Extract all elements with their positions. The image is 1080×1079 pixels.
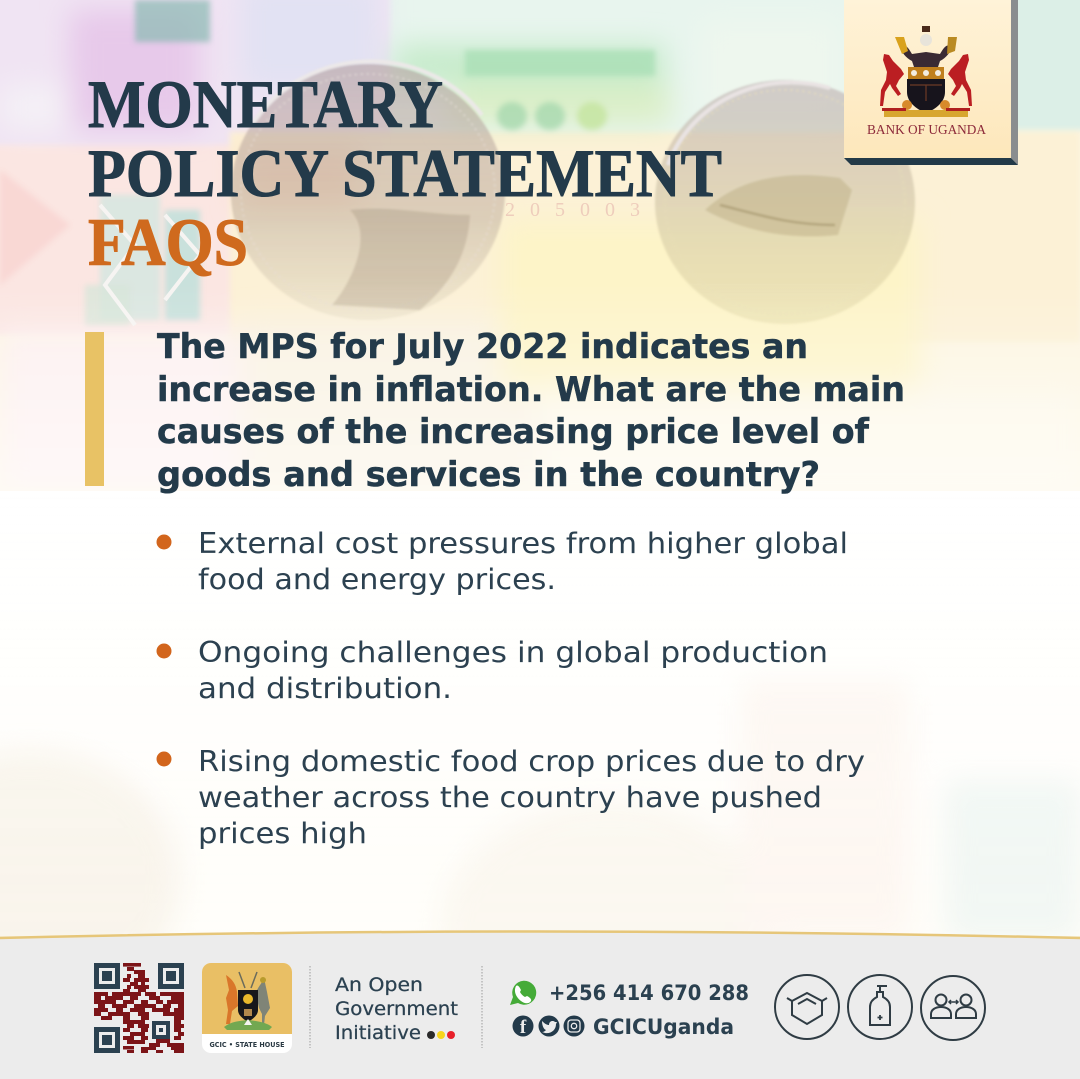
bullet 3 (156, 745, 865, 850)
contact: phone: +256 414 670 288 (549, 981, 749, 1005)
icon: WhatsApp (510, 981, 536, 1005)
contact: social handle: GCICUganda (593, 1015, 734, 1039)
bullet 2: and distribution. (198, 672, 452, 705)
icon: instagram (564, 1016, 584, 1036)
icon: facebook: f (520, 1017, 527, 1038)
banknote zigzag (100, 205, 200, 325)
bullet 3: prices high (198, 817, 367, 850)
title accent: FAQS: FAQS (88, 204, 248, 280)
banknote serial number: 205003 (505, 199, 640, 221)
tagline: An Open Government Initiative: An Open (335, 974, 423, 996)
logo label: BANK OF UGANDA (867, 122, 986, 137)
question heading: causes of the increasing price level of (157, 412, 870, 452)
bullet 3: weather across the country have pushed (198, 781, 822, 814)
icon: Bank of Uganda crest (880, 26, 972, 117)
bullet 1 (156, 527, 848, 596)
title (88, 66, 722, 280)
divider (309, 966, 311, 1048)
footer band (0, 932, 1080, 1079)
logo card: Bank of Uganda (844, 0, 1018, 165)
coin: right (655, 80, 915, 324)
icon: face mask (775, 975, 839, 1039)
question heading (157, 327, 905, 495)
title: MONETARY (88, 66, 443, 142)
divider (481, 966, 483, 1048)
icon: Uganda coat of arms (224, 972, 272, 1030)
flag dots (427, 1031, 455, 1039)
bullet 1: External cost pressures from higher global (198, 527, 848, 560)
icon: sanitizer bottle (848, 975, 912, 1039)
bullet 3: Rising domestic food crop prices due to dry (198, 745, 865, 778)
bullet list (156, 527, 865, 850)
QR code (94, 963, 184, 1053)
badge label: GCIC • STATE HOUSE (210, 1041, 285, 1049)
bullet 2 (156, 636, 828, 705)
bullet 1: food and energy prices. (198, 563, 556, 596)
accent bar (85, 332, 104, 486)
badge: GCIC State House (202, 963, 292, 1053)
contact: social handle (512, 1015, 734, 1039)
tagline: An Open Government Initiative: Government (335, 998, 458, 1020)
icon: twitter (538, 1016, 560, 1036)
question heading: The MPS for July 2022 indicates an (157, 327, 808, 367)
title: POLICY STATEMENT (88, 135, 722, 211)
coin: left (231, 61, 505, 320)
icon: facebook (512, 1016, 534, 1038)
tagline: An Open Government Initiative (335, 974, 458, 1044)
question heading: increase in inflation. What are the main (157, 370, 905, 410)
tagline: An Open Government Initiative: Initiative (335, 1022, 421, 1044)
bullet 2: Ongoing challenges in global production (198, 636, 828, 669)
icon: social distancing people (921, 976, 985, 1040)
white fade over the lower photo (0, 280, 1080, 491)
question heading: goods and services in the country? (157, 455, 820, 495)
